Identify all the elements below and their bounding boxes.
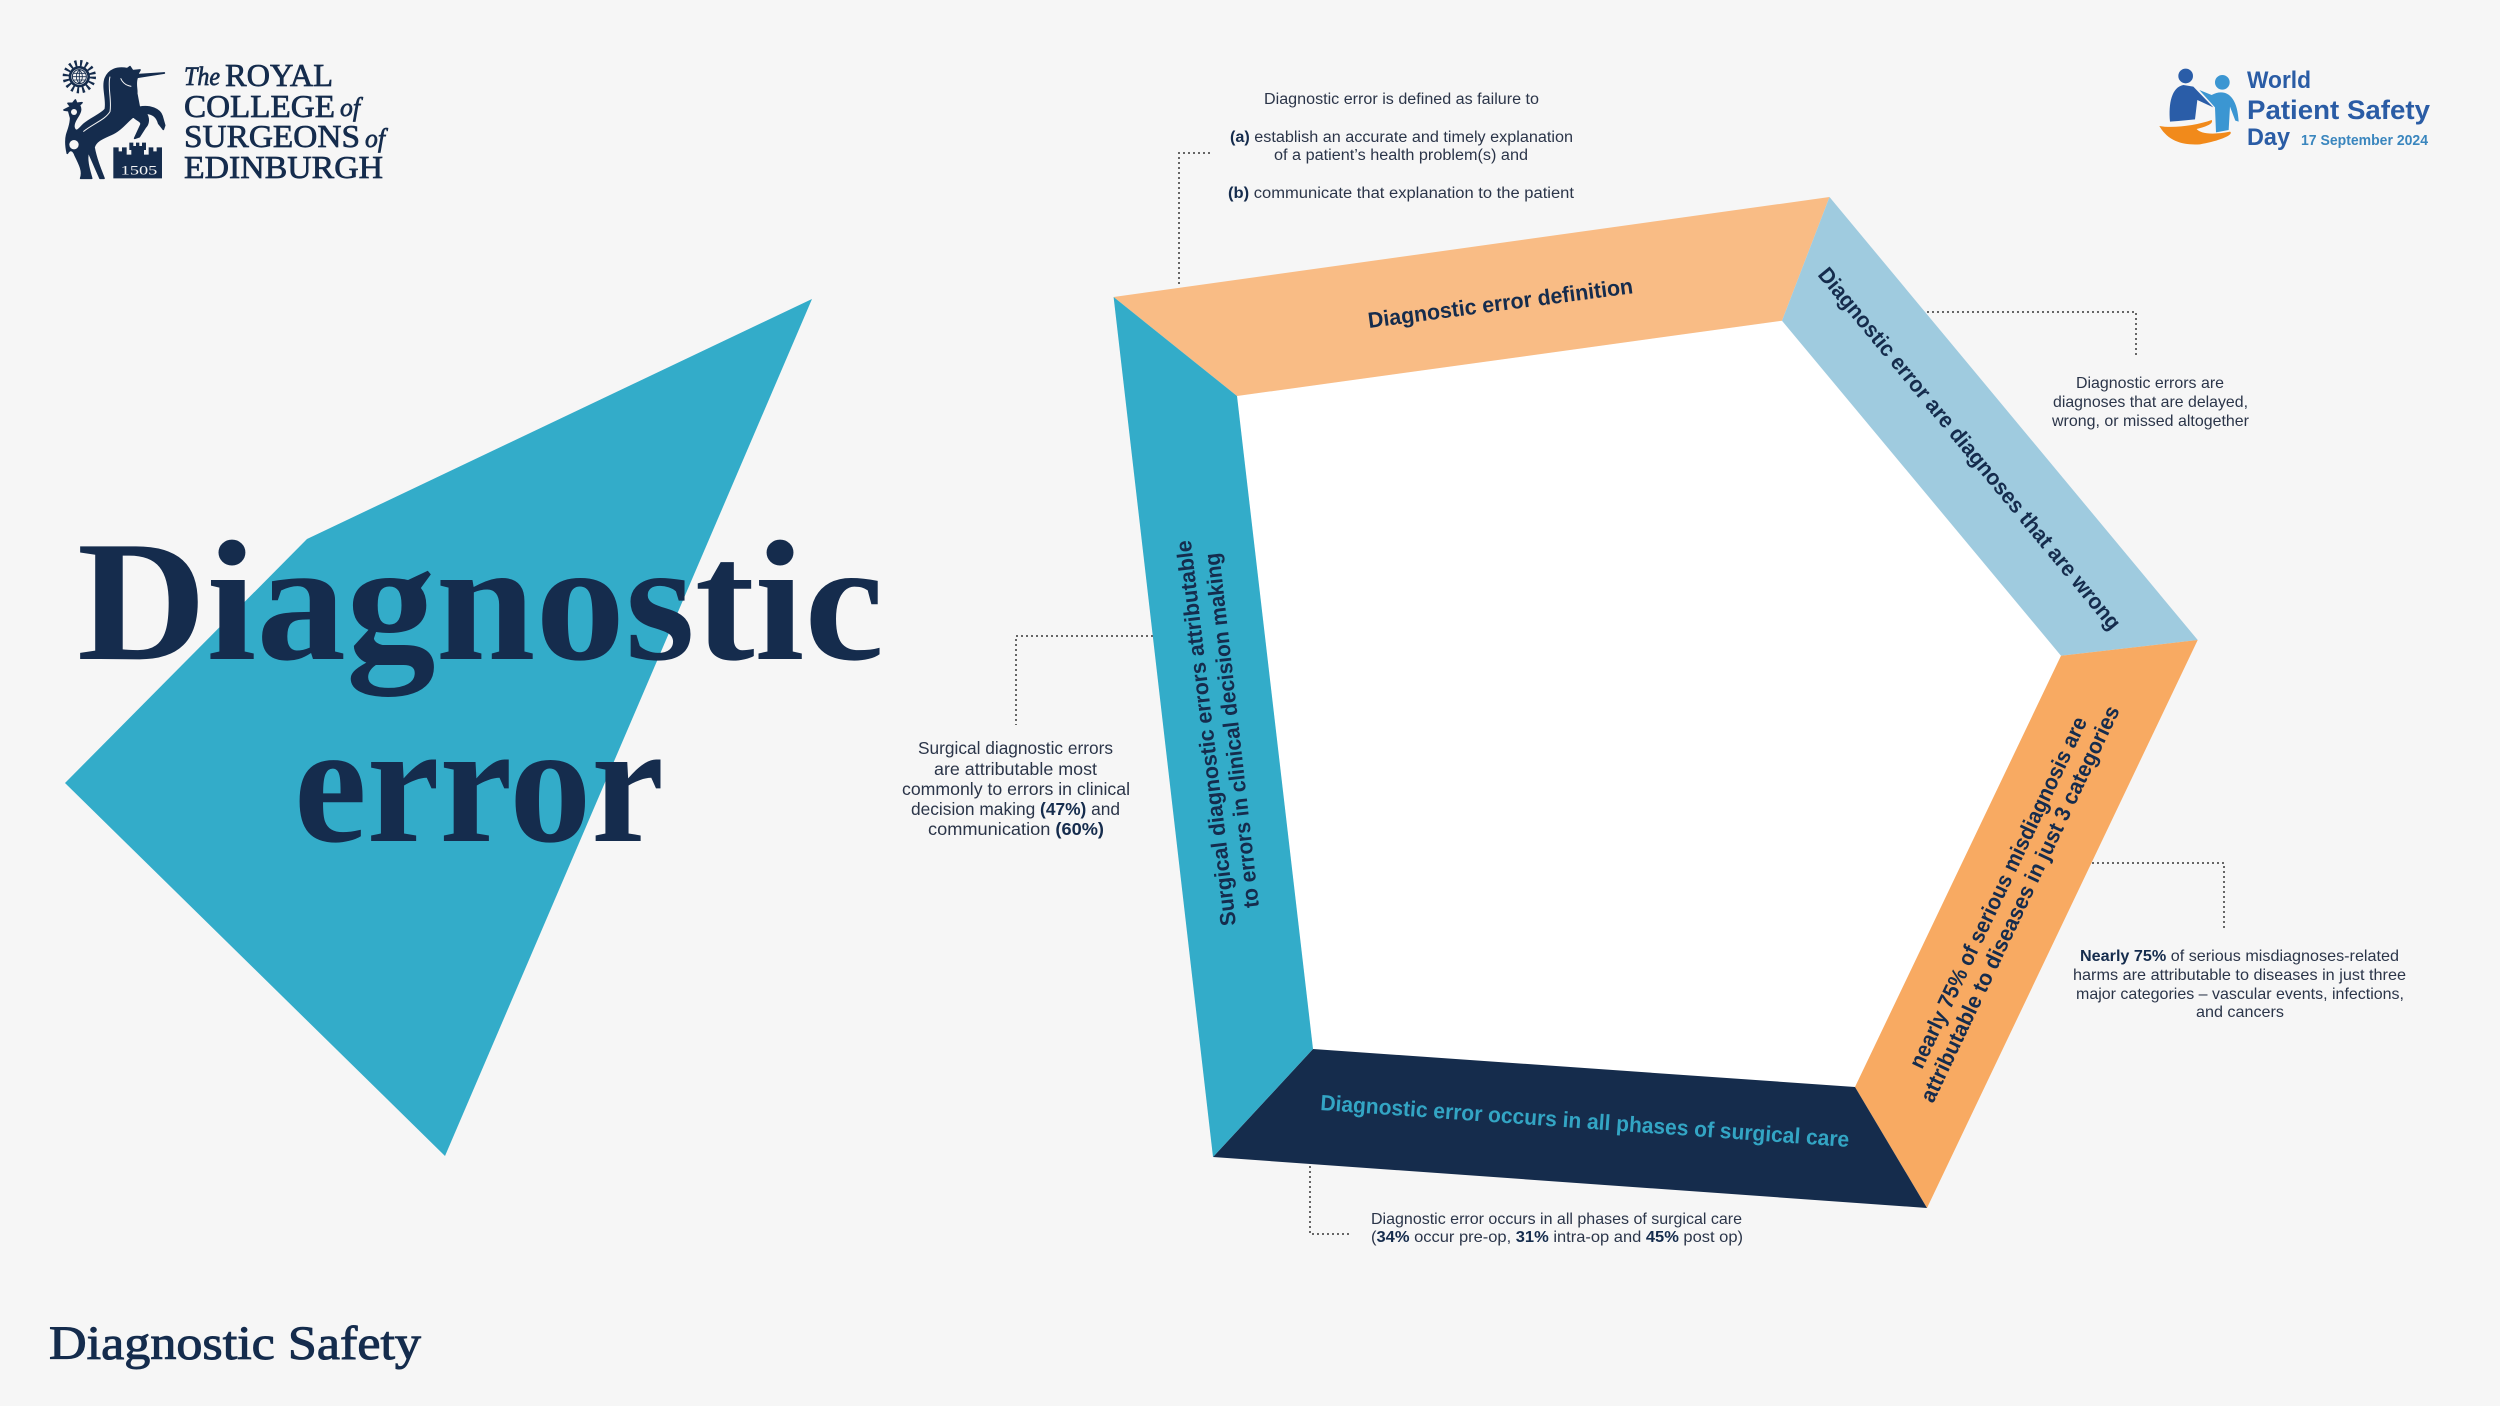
callout: phases percentages note: Diagnostic error occurs in all phases of surgical care [1371, 1211, 1742, 1228]
callout: clinical decision making note: commonly to errors in clinical [902, 779, 1130, 799]
logo wordmark: The [184, 62, 220, 91]
panel: clinical decision making [1114, 297, 1313, 1157]
footer label: Diagnostic Safety [49, 1317, 421, 1370]
icon: unicorn crest: 1505 [121, 164, 157, 178]
logo wordmark: Day [2247, 124, 2291, 151]
callout: nearly 75 percent note: major categories – vascular events, infections, [2076, 986, 2404, 1003]
band heading line 1: nearly 75% of serious misdiagnosis are [1904, 713, 2092, 1072]
callout: nearly 75 percent note: Nearly 75% of serious misdiagnoses-related [2080, 948, 2399, 965]
callout: clinical decision making note: Surgical diagnostic errors [918, 738, 1113, 758]
title [77, 507, 884, 879]
logo wordmark: of [340, 93, 364, 122]
title: error [294, 689, 664, 879]
panel: diagnostic error definition [1114, 197, 1830, 396]
logo: World Patient Safety Day [2159, 67, 2430, 151]
callout: delayed wrong or missed note: wrong, or missed altogether [2051, 413, 2250, 430]
callout: clinical decision making note: are attributable most [934, 759, 1097, 779]
logo wordmark: ROYAL [225, 57, 333, 93]
callout: clinical decision making note: communication (60%) [928, 819, 1104, 839]
logo wordmark [2247, 67, 2430, 151]
logo wordmark [184, 57, 389, 185]
logo wordmark: Patient Safety [2247, 95, 2430, 125]
logo wordmark: 17 September 2024 [2301, 133, 2428, 149]
callout: phases percentages note: (34% occur pre-op, 31% intra-op and 45% post op) [1371, 1229, 1743, 1246]
callout: clinical decision making note [902, 636, 1153, 839]
callout: nearly 75 percent note [2073, 863, 2406, 1021]
callout: phases percentages note [1310, 1166, 1743, 1246]
pentagon inner panel [1237, 321, 2061, 1087]
panel: diagnoses that are wrong [1782, 197, 2198, 656]
band heading: Diagnostic error are diagnoses that are wrong [1813, 262, 2126, 635]
logo: Royal College of Surgeons of Edinburgh [64, 57, 389, 185]
band heading line 2: to errors in clinical decision making [1199, 552, 1264, 909]
logo wordmark: World [2247, 67, 2311, 94]
callout: nearly 75 percent note: harms are attributable to diseases in just three [2073, 967, 2406, 984]
callout: definition note: of a patient’s health problem(s) and [1274, 147, 1528, 164]
callout: definition note: Diagnostic error is defined as failure to [1264, 91, 1539, 108]
panel: misdiagnosis categories [1855, 640, 2198, 1208]
logo wordmark: SURGEONS [184, 118, 360, 154]
band heading: Diagnostic error definition [1366, 273, 1634, 333]
callout: delayed wrong or missed note [1927, 312, 2250, 430]
logo wordmark: COLLEGE [184, 88, 335, 124]
callout: clinical decision making note: decision making (47%) and [911, 799, 1120, 819]
icon: two people and a hand [2159, 69, 2239, 144]
callout: delayed wrong or missed note: Diagnostic errors are [2076, 375, 2224, 392]
logo wordmark: of [365, 124, 389, 153]
callout: nearly 75 percent note: and cancers [2196, 1004, 2284, 1021]
callout: delayed wrong or missed note: diagnoses that are delayed, [2053, 394, 2248, 411]
callout: definition note: (b) communicate that explanation to the patient [1228, 185, 1575, 202]
band heading line 2: attributable to diseases in just 3 categories [1915, 702, 2125, 1106]
decorative teal arrow shape [65, 299, 812, 1156]
icon: unicorn crest [64, 64, 165, 178]
logo wordmark: EDINBURGH [184, 149, 383, 185]
band heading line 1: Surgical diagnostic errors attributable [1171, 539, 1241, 927]
callout: definition note: (a) establish an accurate and timely explanation [1230, 129, 1573, 146]
panel: phases of surgical care [1213, 1049, 1927, 1208]
band heading: Diagnostic error occurs in all phases of surgical care [1320, 1090, 1850, 1152]
title: Diagnostic [77, 507, 884, 697]
callout: definition note [1179, 91, 1575, 287]
